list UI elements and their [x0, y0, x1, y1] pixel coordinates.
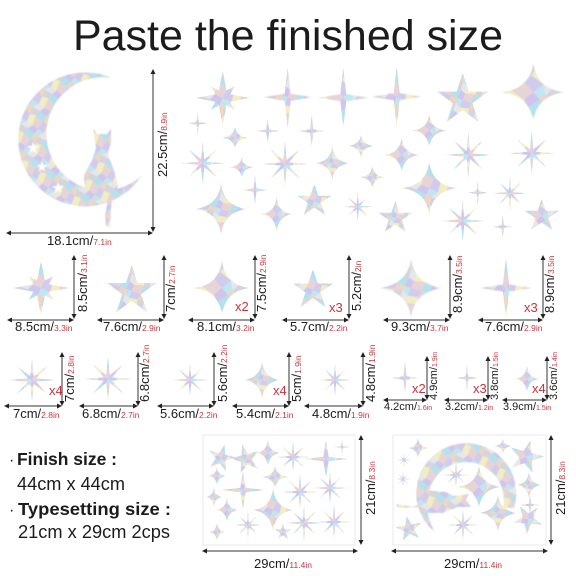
size item: eight-point star 7cm x4: x4 [49, 383, 63, 398]
size item: eight-point star 4.8cm: 4.8cm/1.9in [312, 406, 370, 421]
panel: typesetting sheet two: 29cm/11.4in [444, 556, 502, 571]
size item: four-point star 5.4cm x4: 5cm/1.9in [289, 355, 304, 402]
size item: eight-point star 7cm x4 [5, 353, 77, 421]
size item: small cross star 4.2cm x2: 4.2cm/1.6in [384, 401, 432, 413]
size item: four-point star 8.1cm x2 [189, 254, 269, 334]
size item: small four-point star 3.9cm x4: 3.6cm/1.4in [548, 352, 560, 400]
panel: typesetting sheet two [392, 435, 568, 571]
size item: small cross star 3.2cm x3: 3.8cm/1.5in [489, 352, 501, 400]
panel: typesetting sheet two: 21cm/8.3in [553, 461, 568, 515]
size item: slim cross star 7.6cm x3: 7.6cm/2.9in [485, 319, 543, 334]
panel: typesetting sheet one [203, 435, 378, 571]
text block: finish and typesetting sizes: · [9, 452, 14, 469]
size item: small cross star 3.2cm x3: 3.2cm/1.2in [445, 401, 493, 413]
size item: five-point star 7.6cm: 7.6cm/2.9in [103, 319, 161, 334]
size item: small cross star 3.2cm x3 [445, 352, 501, 413]
size item: five-point star 7.6cm: 7cm/2.7in [163, 265, 178, 312]
icon: crescent moon with cat [18, 72, 142, 227]
size item: four-point star 5.4cm x4: x4 [273, 383, 287, 398]
size item: four-point star 8.5cm [8, 254, 90, 334]
size item: small four-point star 3.9cm x4: x4 [532, 381, 546, 396]
size item: eight-point star 5.6cm: 5.6cm/2.2in [215, 344, 230, 402]
size item: small cross star 4.2cm x2 [384, 352, 440, 413]
size item: slim cross star 7.6cm x3: 8.9cm/3.5in [542, 255, 557, 313]
panel: typesetting sheet one: 21cm/8.3in [363, 461, 378, 515]
size item: small cross star 4.2cm x2: 4.9cm/1.9in [428, 352, 440, 400]
size item: eight-point star 4.8cm [305, 344, 378, 421]
size item: five-point star 5.7cm x3 [283, 256, 364, 334]
text block: finish and typesetting sizes [9, 449, 171, 542]
text block: finish and typesetting sizes: 44cm x 44cm [17, 474, 125, 494]
size item: small four-point star 3.9cm x4 [503, 352, 560, 413]
size item: slim cross star 7.6cm x3: x3 [524, 300, 538, 315]
size item: eight-point star 5.6cm: 5.6cm/2.2in [160, 406, 218, 421]
height dimension: 22.5cm/8.9in [155, 112, 170, 177]
size item: four-point star 8.1cm x2: x2 [235, 299, 249, 314]
size item: five-point star 5.7cm x3: 5.2cm/2in [349, 260, 364, 311]
size item: small four-point star 3.9cm x4: 3.9cm/1.5in [503, 401, 551, 413]
text block: finish and typesetting sizes: · [9, 502, 14, 519]
panel: moon and cat sticker with dimensions [7, 70, 170, 248]
size item: small cross star 4.2cm x2: x2 [412, 381, 426, 396]
size item: five-point star 7.6cm [98, 256, 178, 334]
text block: finish and typesetting sizes: 21cm x 29cm 2cps [18, 522, 170, 542]
size item: five-point star 5.7cm x3: 5.7cm/2.2in [290, 319, 348, 334]
size item: small cross star 3.2cm x3: x3 [473, 381, 487, 396]
size item: four-point star 5.4cm x4 [233, 353, 304, 421]
size item: four-point star 9.3cm [379, 255, 465, 334]
text block: finish and typesetting sizes: Typesetting size : [18, 499, 171, 519]
size item: eight-point star 6.8cm: 6.8cm/2.7in [82, 406, 140, 421]
panel: full star collection [181, 63, 564, 242]
size item: four-point star 5.4cm x4: 5.4cm/2.1in [236, 406, 294, 421]
size item: eight-point star 6.8cm [80, 344, 152, 421]
width dimension: 18.1cm/7.1in [47, 233, 112, 248]
panel: typesetting sheet one: 29cm/11.4in [254, 556, 312, 571]
size item: eight-point star 6.8cm: 6.8cm/2.7in [137, 344, 152, 402]
size item: four-point star 8.5cm: 8.5cm/3.3in [15, 319, 73, 334]
title: Paste the finished size [73, 12, 503, 60]
text block: finish and typesetting sizes: Finish size : [17, 449, 117, 469]
size item: five-point star 5.7cm x3: x3 [329, 300, 343, 315]
size item: eight-point star 5.6cm [158, 344, 230, 421]
size item: four-point star 9.3cm: 8.9cm/3.5in [450, 255, 465, 313]
size item: four-point star 8.1cm x2: 8.1cm/3.2in [197, 319, 255, 334]
size item: slim cross star 7.6cm x3 [479, 255, 557, 334]
size item: four-point star 9.3cm: 9.3cm/3.7in [391, 319, 449, 334]
size item: eight-point star 4.8cm: 4.8cm/1.9in [363, 344, 378, 402]
size item: four-point star 8.1cm x2: 7.5cm/2.9in [254, 254, 269, 312]
size item: four-point star 8.5cm: 8.5cm/3.1in [75, 254, 90, 312]
size item: eight-point star 7cm x4: 7cm/2.8in [62, 355, 77, 402]
size item: eight-point star 7cm x4: 7cm/2.8in [13, 406, 60, 421]
